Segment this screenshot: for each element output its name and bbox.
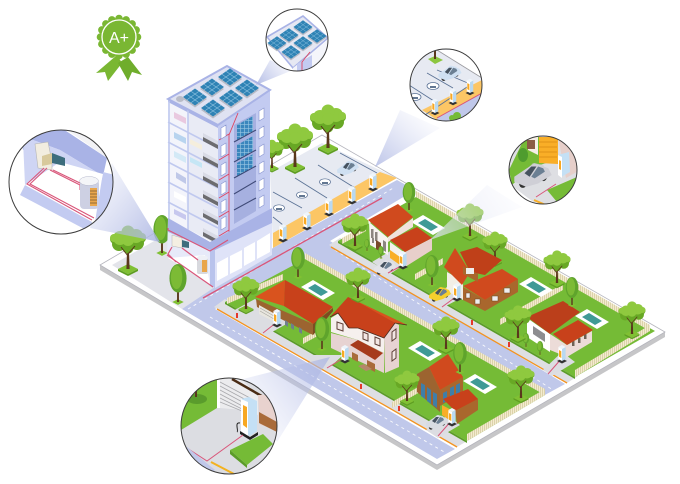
house 1 xyxy=(255,280,333,335)
callout: parking chargers xyxy=(409,49,482,125)
right face xyxy=(218,90,270,243)
badge: A+ energy rating: A+ xyxy=(109,30,129,47)
beam: solar circle xyxy=(256,60,293,85)
house 6 xyxy=(417,354,478,424)
parking lot xyxy=(270,143,397,248)
house 2 xyxy=(330,297,407,373)
front trees xyxy=(110,203,646,406)
pools xyxy=(301,215,609,394)
vertical power cable xyxy=(219,113,238,240)
power lines in lots xyxy=(263,265,562,436)
beam: left circle xyxy=(90,163,160,242)
driveways xyxy=(231,250,575,438)
platform base xyxy=(100,135,665,470)
home cars xyxy=(374,260,451,430)
tower building xyxy=(167,66,272,288)
house 3 xyxy=(364,204,432,267)
roads xyxy=(182,180,565,459)
house 4 xyxy=(444,247,518,311)
small windows xyxy=(221,108,264,230)
beam: driveway circle xyxy=(430,185,522,240)
left face xyxy=(168,99,218,245)
gray plaza by the tower xyxy=(112,232,225,309)
house 5 xyxy=(523,301,593,357)
ground floor xyxy=(167,208,272,288)
beam: bottom circle xyxy=(243,357,330,442)
callout: rooftop solar panels xyxy=(266,9,328,72)
fences xyxy=(227,191,650,441)
callout: house charger and car xyxy=(509,136,580,206)
badge: A+ energy rating xyxy=(96,15,142,81)
back trees xyxy=(153,104,508,279)
block: middle lots xyxy=(214,259,545,447)
parking chargers xyxy=(278,173,378,242)
window panel xyxy=(234,113,256,224)
parked car xyxy=(337,160,359,176)
home chargers xyxy=(272,251,567,426)
beam: parking circle xyxy=(375,110,440,167)
callout: driveway charger xyxy=(180,378,280,478)
hydrants xyxy=(236,313,510,411)
block: upper lots xyxy=(329,197,655,383)
roof xyxy=(168,66,270,125)
balconies xyxy=(203,133,218,244)
callout: heat pump and cabling xyxy=(9,125,115,234)
